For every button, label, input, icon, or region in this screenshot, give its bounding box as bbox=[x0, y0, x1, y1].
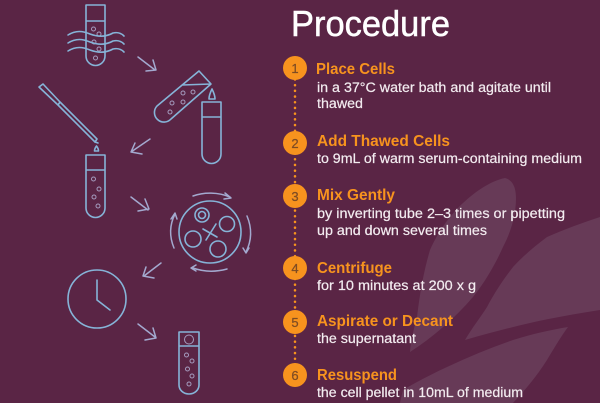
arrow: step 5 to 6 bbox=[138, 324, 156, 340]
step 1: 1 bbox=[291, 61, 299, 76]
step 1: Place Cells bbox=[316, 61, 395, 78]
step 2: to 9mL of warm serum-containing medium bbox=[317, 151, 582, 166]
icon: tube in water bath bbox=[68, 5, 124, 66]
step 6: the cell pellet in 10mL of medium bbox=[317, 385, 523, 400]
title: Procedure bbox=[291, 3, 450, 44]
step 3: Mix Gently bbox=[317, 187, 395, 204]
step 5: Aspirate or Decant bbox=[317, 313, 454, 330]
step 2: Add Thawed Cells bbox=[317, 133, 450, 150]
step 3: by inverting tube 2–3 times or pipetting bbox=[317, 206, 565, 221]
arrow: step 1 to 2 bbox=[138, 57, 156, 71]
step 2: 2 bbox=[291, 136, 299, 151]
icon: tilted tube pouring bbox=[154, 71, 215, 122]
step 3 bbox=[283, 184, 565, 238]
step 2 bbox=[283, 131, 582, 166]
step 6: Resuspend bbox=[317, 367, 397, 384]
icon: pipette bbox=[39, 84, 98, 151]
step 1 bbox=[283, 56, 551, 111]
icon: clock bbox=[68, 270, 126, 328]
step 4: Centrifuge bbox=[317, 260, 392, 277]
step 3: 3 bbox=[291, 189, 299, 204]
step 5: the supernatant bbox=[317, 331, 416, 346]
step 1: thawed bbox=[317, 96, 363, 111]
icon: culture dish bbox=[171, 193, 251, 271]
icon: receiving tube bbox=[202, 102, 221, 164]
step 4: for 10 minutes at 200 x g bbox=[317, 278, 476, 293]
step 6 bbox=[283, 363, 523, 400]
step 5 bbox=[283, 310, 454, 346]
arrow: step 4 to 5 bbox=[143, 263, 161, 278]
step 5: 5 bbox=[291, 315, 299, 330]
arrow: step 3 to 4 bbox=[131, 197, 149, 211]
step 6: 6 bbox=[291, 368, 299, 383]
icon: resuspended tube bbox=[179, 332, 199, 394]
icon: tube with cells bbox=[86, 155, 105, 218]
background leaf motif bbox=[400, 178, 600, 403]
step 4 bbox=[283, 256, 476, 293]
step 1: in a 37°C water bath and agitate until bbox=[317, 80, 551, 95]
step 3: up and down several times bbox=[317, 223, 487, 238]
dotted timeline bbox=[294, 68, 296, 375]
step 4: 4 bbox=[291, 261, 299, 276]
arrow: step 2 to 3 bbox=[131, 139, 150, 154]
